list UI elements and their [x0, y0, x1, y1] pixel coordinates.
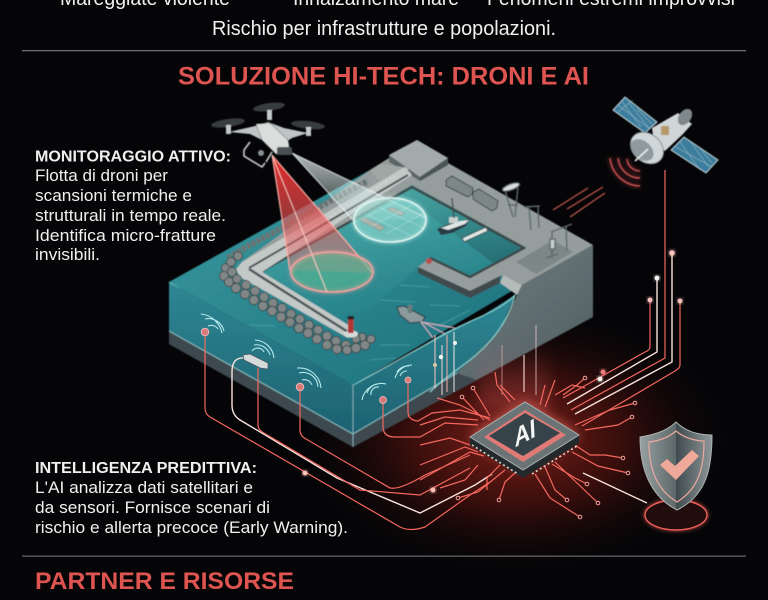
pier front face [418, 267, 500, 298]
breakwater rocks [219, 252, 375, 355]
text block: active monitoring: Flotta di droni per [35, 167, 169, 185]
AI chip radial traces [458, 372, 647, 517]
heading: partners: PARTNER E RISORSE [35, 568, 294, 595]
solar panel right [671, 137, 718, 173]
quay equipment towers [502, 181, 572, 258]
text block: active monitoring: strutturali in tempo reale. [35, 207, 226, 225]
drone [211, 101, 325, 167]
isometric harbour illustration [169, 140, 593, 447]
harbour basin [260, 185, 525, 325]
boat signal lines [421, 322, 455, 338]
text block: active monitoring: scansioni termiche e [35, 187, 192, 205]
circuit traces from sensors [205, 333, 492, 530]
barges [359, 207, 405, 231]
text block: predictive intelligence: L'AI analizza dati satellitari e [35, 479, 253, 497]
quay ramp [500, 275, 522, 295]
icon: AI chip [470, 402, 579, 478]
white scan beam [292, 153, 427, 242]
sensors on seabed [201, 328, 411, 404]
red circuit glow [305, 310, 725, 570]
signal arcs [610, 158, 640, 186]
lighthouse [344, 316, 358, 338]
sensor wifi arcs [201, 314, 412, 400]
satellite body [652, 106, 695, 151]
quay concrete [242, 158, 593, 291]
top text: risk factors: Rischio per infrastrutture e popolazioni. [212, 18, 556, 40]
upper breakwater rocks [228, 181, 368, 258]
text block: active monitoring: invisibili. [35, 246, 100, 264]
trace end pads [456, 376, 637, 519]
satellite [553, 97, 718, 217]
side faces and seabed [169, 245, 593, 447]
signal streaks [553, 187, 605, 217]
text block: predictive intelligence: rischio e allerta precoce (Early Warning). [35, 519, 348, 537]
concrete apron patch [516, 240, 573, 274]
dish [624, 126, 670, 170]
icon: shield with check [640, 422, 712, 530]
pier marker [426, 258, 432, 264]
text block: active monitoring: MONITORAGGIO ATTIVO: [35, 148, 231, 166]
vertical data streaks [433, 325, 550, 410]
heading: solution: SOLUZIONE HI-TECH: DRONI E AI [178, 62, 589, 90]
text block: predictive intelligence: INTELLIGENZA PREDITTIVA: [35, 460, 257, 477]
solar panel left [613, 97, 657, 133]
basin wall [262, 187, 524, 277]
top text: risk factors [60, 0, 735, 40]
storage boxes [446, 176, 498, 211]
text block: active monitoring [35, 148, 231, 264]
patrol boat [397, 305, 425, 323]
jetty bar [462, 227, 488, 242]
red scan beam [272, 155, 373, 292]
text block: active monitoring: Identifica micro-fratture [35, 227, 216, 245]
water surface [169, 170, 522, 385]
ship large [437, 198, 470, 235]
breakwater arms [236, 167, 412, 338]
text block: predictive intelligence: da sensori. Fornisce scenari di [35, 499, 270, 517]
circuit traces from satellite [303, 170, 682, 492]
text block: predictive intelligence [35, 460, 348, 537]
water ripples [250, 285, 470, 360]
building [370, 140, 448, 181]
icon: AI chip: AI [514, 413, 536, 454]
